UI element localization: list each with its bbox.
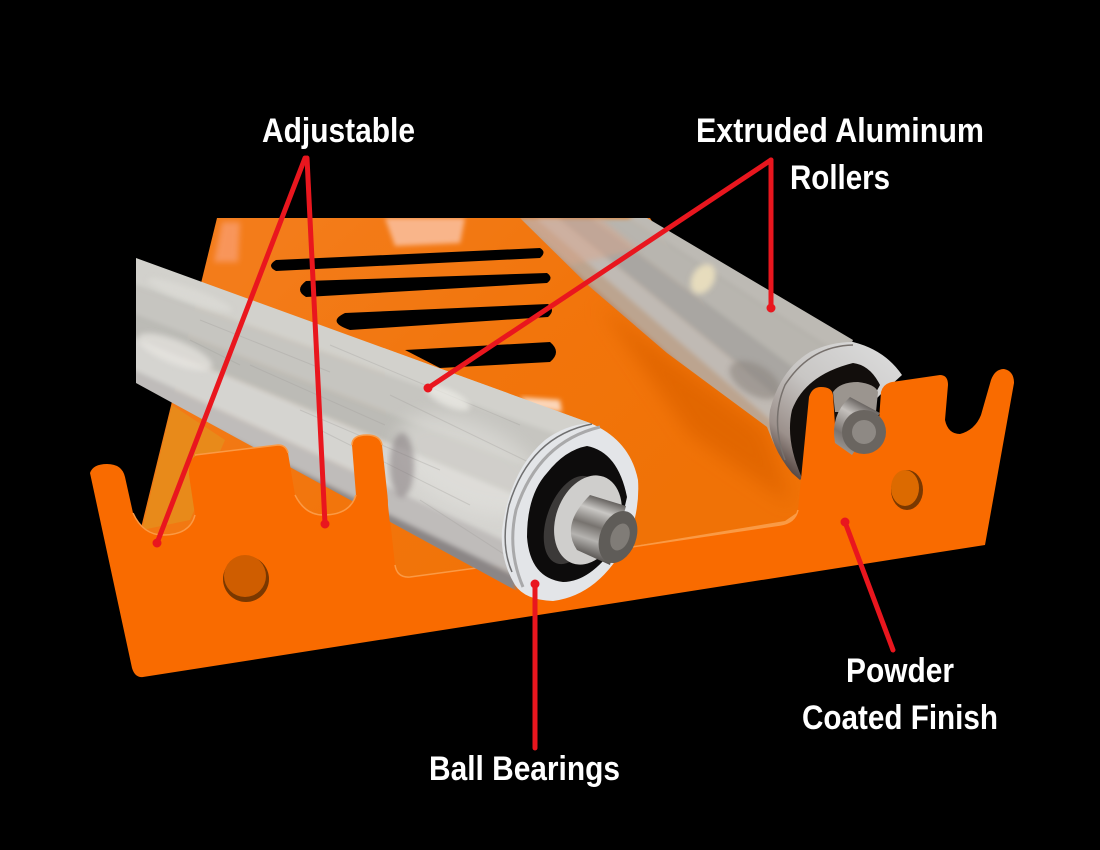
roller end cap bbox=[502, 423, 638, 601]
mounting hole left bbox=[223, 555, 269, 602]
axle pin bbox=[571, 495, 626, 565]
front roller body bbox=[100, 230, 610, 610]
label: extruded aluminum rollers: Rollers bbox=[790, 159, 890, 197]
mounting hole right bbox=[891, 470, 923, 510]
rear axle pin bbox=[834, 397, 886, 455]
leader: ball bearings bbox=[532, 580, 538, 748]
rear bearing bbox=[790, 363, 880, 478]
label: ball bearings: Ball Bearings bbox=[429, 750, 620, 788]
rear roller bbox=[520, 218, 902, 480]
back tray floor bbox=[140, 218, 815, 590]
label: extruded aluminum rollers: Extruded Aluminum bbox=[696, 112, 984, 150]
leader: extruded aluminum rollers bbox=[424, 160, 774, 392]
front bracket with adjustment notches bbox=[90, 369, 1014, 677]
callout lines and dots bbox=[154, 158, 893, 748]
product photo: roller assembly bbox=[90, 200, 1014, 677]
front roller overlapping bracket bbox=[384, 348, 638, 601]
label: adjustable: Adjustable bbox=[262, 112, 415, 150]
leader: powder coated finish bbox=[842, 518, 893, 650]
label: extruded aluminum rollers bbox=[696, 112, 984, 197]
leader: adjustable bbox=[154, 158, 328, 546]
label: powder coated finish bbox=[802, 652, 998, 737]
rear roller end rim bbox=[769, 342, 902, 480]
label: powder coated finish: Coated Finish bbox=[802, 699, 998, 737]
label: powder coated finish: Powder bbox=[846, 652, 954, 690]
ball bearing bbox=[527, 446, 627, 582]
vent slots bbox=[271, 248, 556, 368]
